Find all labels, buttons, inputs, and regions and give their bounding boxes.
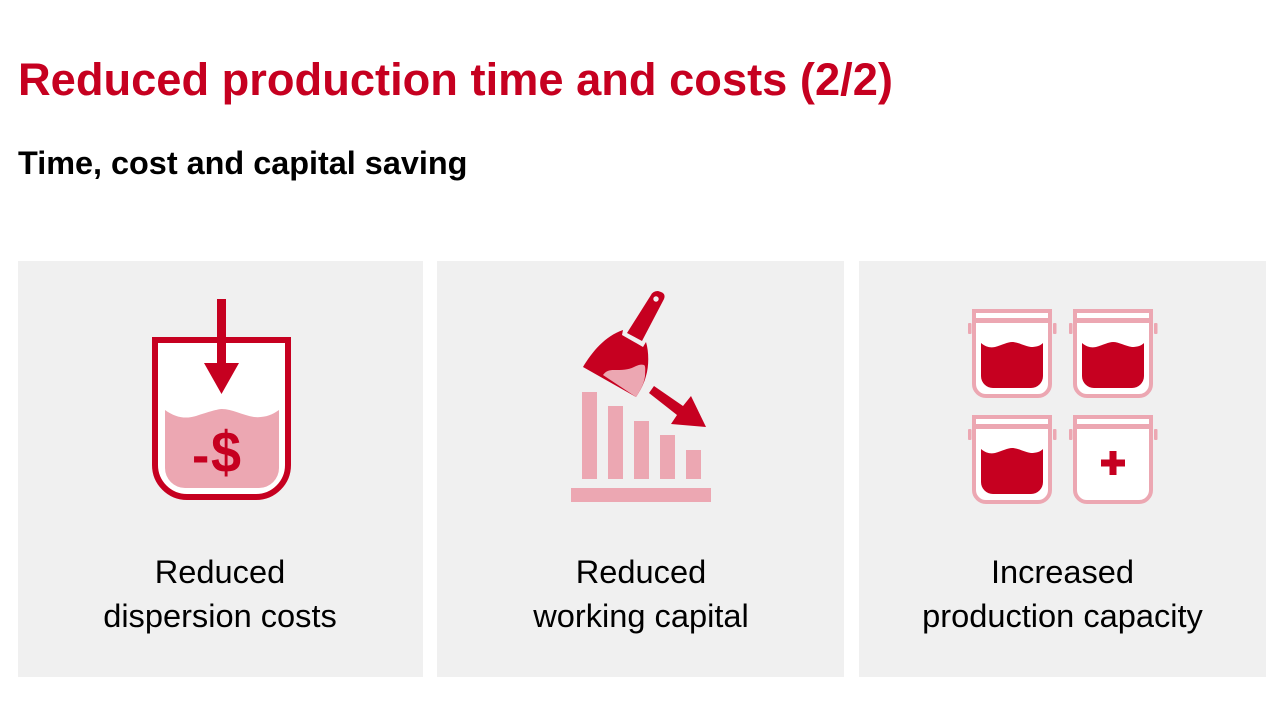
label: working capital: [532, 597, 749, 634]
bar chart: [571, 392, 711, 502]
beaker 3: [968, 417, 1056, 502]
brush: [583, 291, 665, 397]
panel: increased production capacity: [859, 261, 1266, 677]
panel background: [18, 261, 423, 677]
icon: beaker with falling cost: [155, 299, 288, 497]
panel: reduced dispersion costs: [18, 261, 423, 677]
label: production capacity: [922, 597, 1204, 634]
title: Reduced production time and costs (2/2): [18, 54, 893, 105]
beaker 2: [1069, 311, 1158, 396]
beaker 1: [968, 311, 1056, 396]
subtitle: Time, cost and capital saving: [18, 145, 467, 181]
arrow: [649, 386, 706, 427]
icon: four beakers, one empty with plus: [968, 311, 1158, 502]
panel background: [859, 261, 1266, 677]
icon: falling bar chart with brush: [571, 291, 711, 502]
label: Increased: [991, 553, 1134, 590]
label: Reduced: [576, 553, 706, 590]
label: dispersion costs: [103, 597, 337, 634]
icon: beaker with falling cost: -: [192, 427, 209, 485]
icon: beaker with falling cost: $: [211, 420, 241, 485]
label: Reduced: [155, 553, 285, 590]
panel background: [437, 261, 844, 677]
panel: reduced working capital: [437, 261, 844, 677]
beaker 4 with plus: [1069, 417, 1158, 502]
